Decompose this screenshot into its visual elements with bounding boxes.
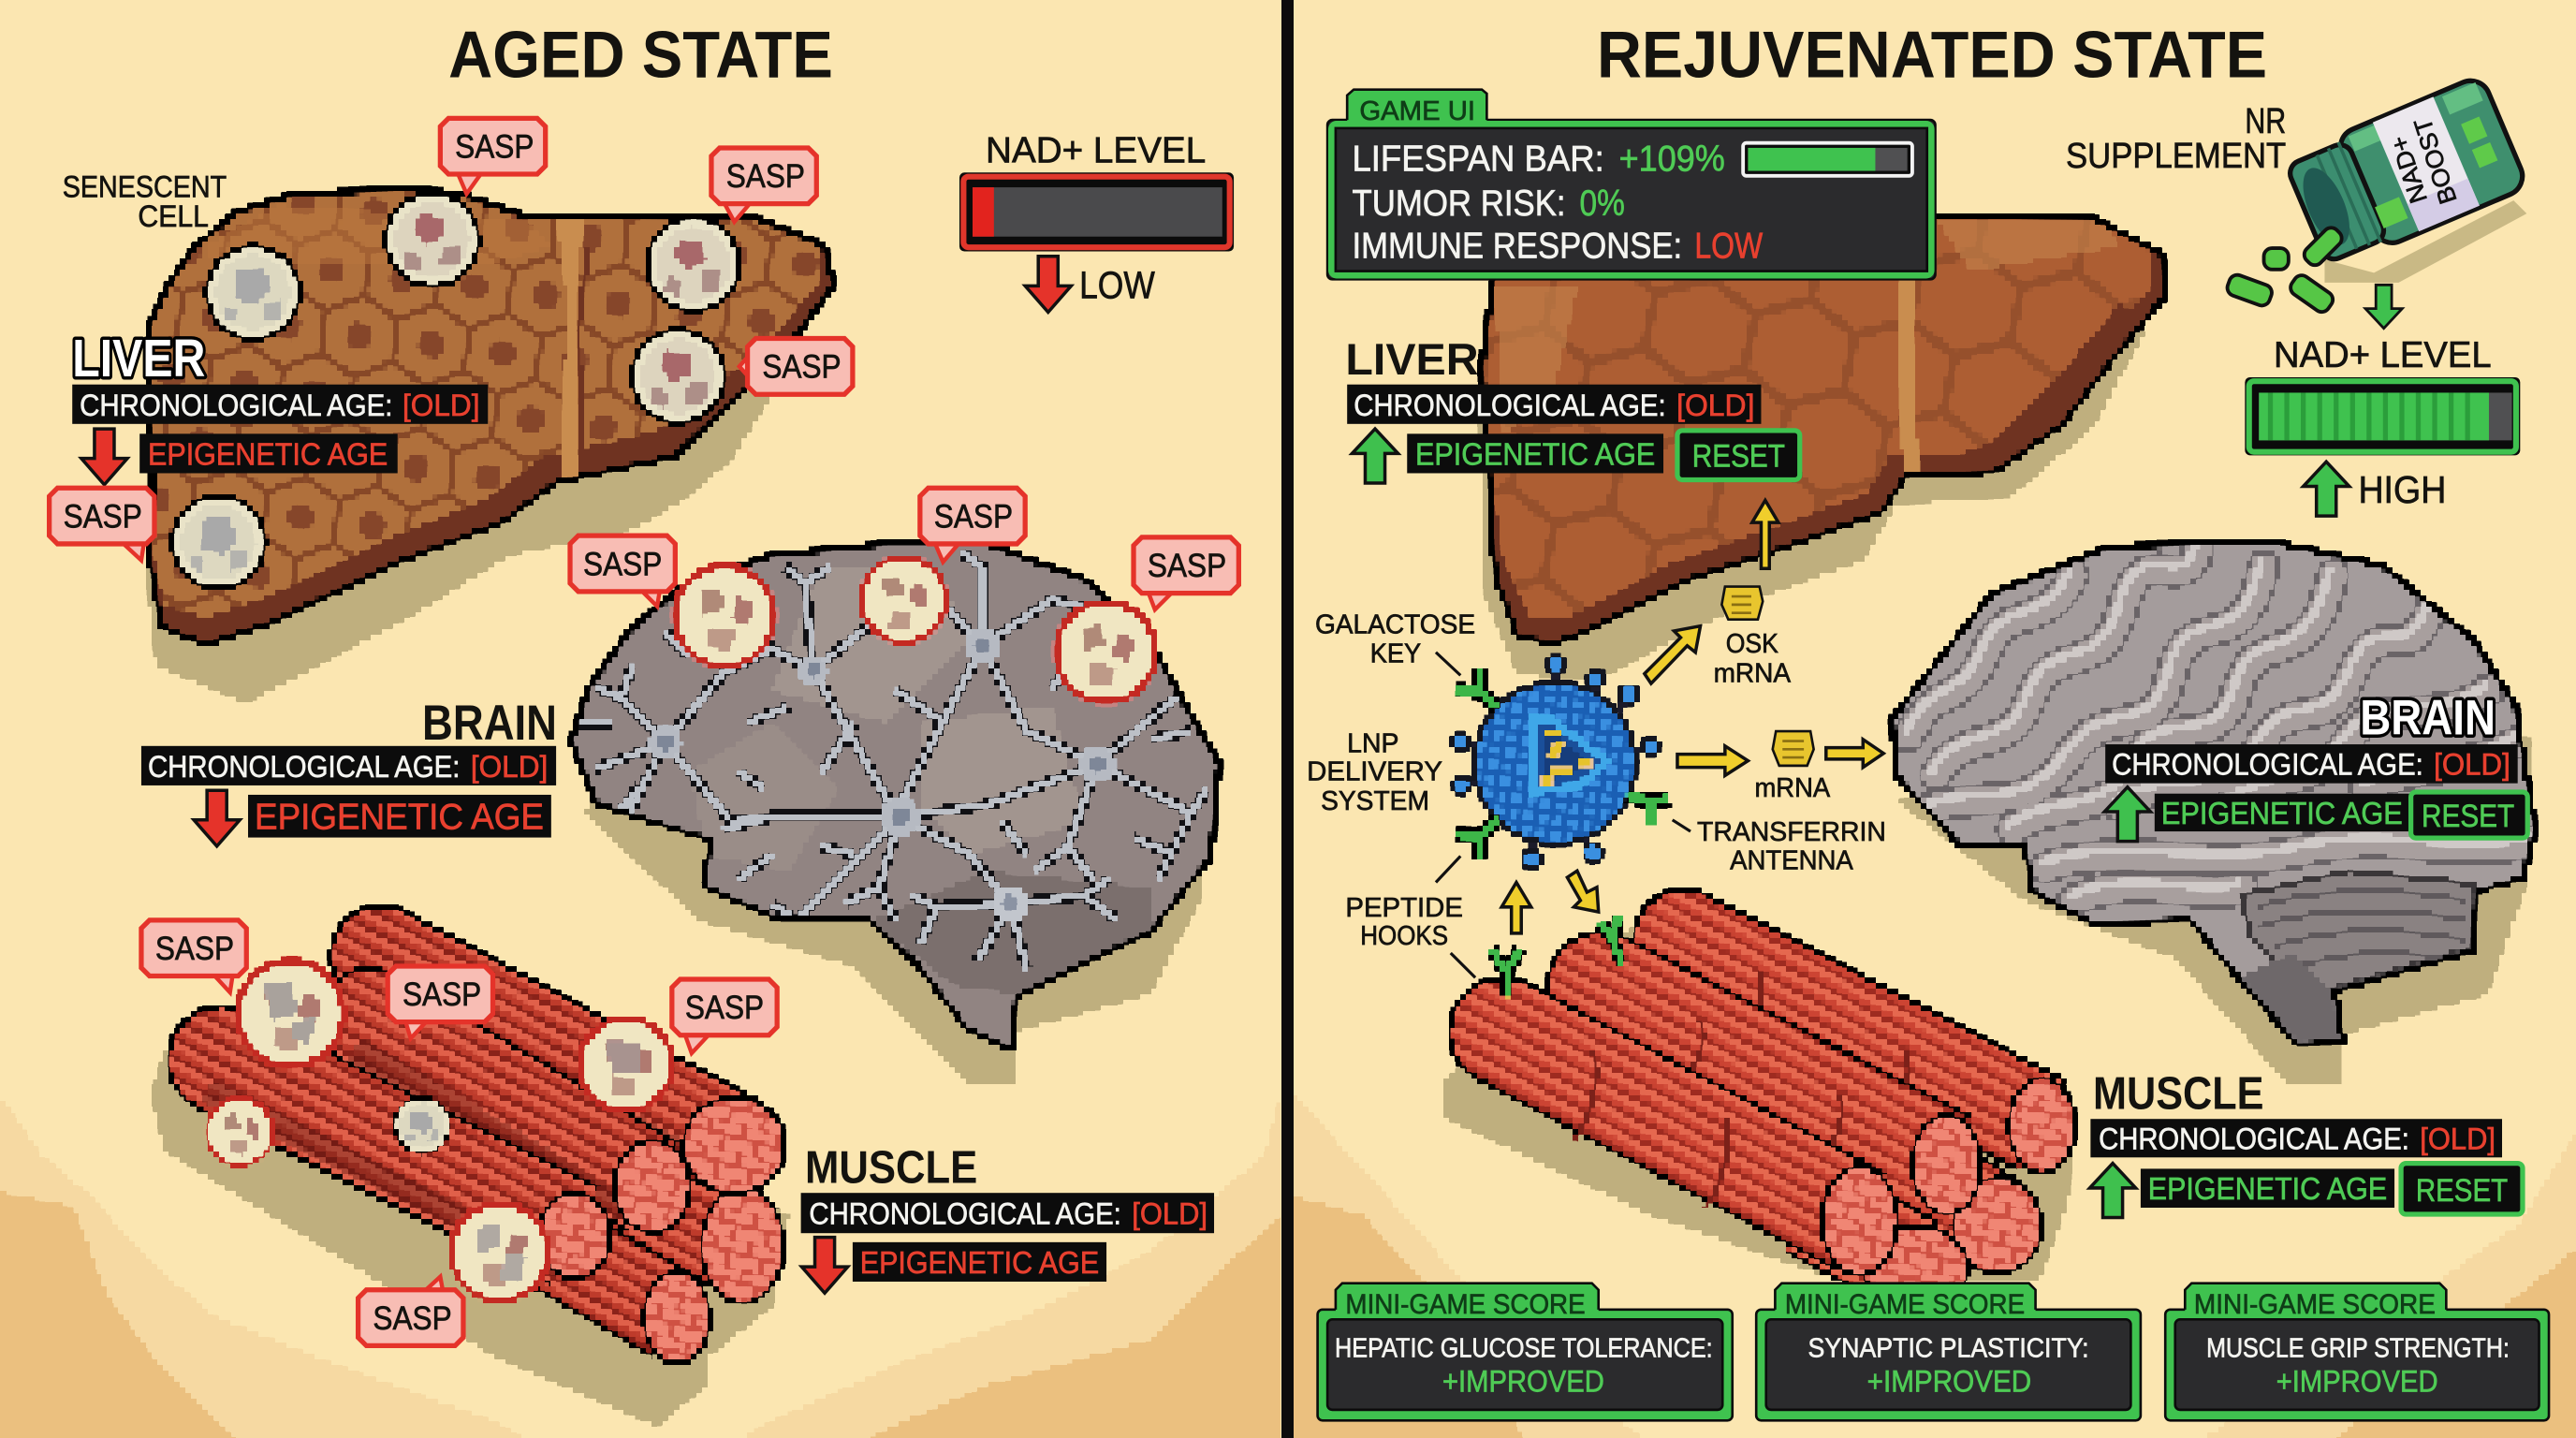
sasp bubble: SASP	[155, 931, 234, 967]
green antennas	[1457, 668, 1669, 858]
mini-game score: synaptic: MINI-GAME SCORE	[1785, 1289, 2025, 1320]
yellow arrows	[1501, 500, 1883, 933]
sasp bubble	[1134, 537, 1238, 609]
delivery labels: KEY	[1370, 638, 1421, 668]
game ui panel	[1327, 90, 1936, 279]
delivery labels: DELIVERY	[1307, 757, 1442, 787]
mini-game score: muscle: MUSCLE GRIP STRENGTH:	[2206, 1334, 2510, 1364]
muscle labels, rejuvenated: EPIGENETIC AGE	[2148, 1172, 2387, 1207]
sasp bubble	[711, 148, 816, 222]
virus spikes	[1453, 656, 1659, 869]
liver, aged	[131, 165, 855, 703]
mini-game score: muscle: +IMPROVED	[2276, 1365, 2438, 1399]
label: senescent cell: SENESCENT	[63, 170, 227, 204]
divider	[1281, 0, 1294, 1438]
fiber b	[317, 966, 690, 1232]
game ui panel: TUMOR RISK:	[1352, 183, 1566, 224]
label: nr supplement: SUPPLEMENT	[2066, 136, 2286, 175]
arrow toward brain	[1826, 740, 1883, 768]
muscle labels, aged: [OLD]	[1132, 1197, 1208, 1231]
muscle labels, rejuvenated: [OLD]	[2420, 1123, 2496, 1156]
delivery labels: mRNA	[1714, 658, 1792, 688]
label: nr supplement: NR	[2245, 101, 2286, 140]
muscle labels, rejuvenated: CHRONOLOGICAL AGE:	[2099, 1123, 2409, 1156]
mini-game score: muscle	[2165, 1284, 2549, 1420]
liver labels, aged: EPIGENETIC AGE	[148, 438, 388, 473]
sasp bubble	[672, 979, 777, 1053]
brain labels, aged: EPIGENETIC AGE	[255, 797, 544, 837]
liver labels, rejuvenated: RESET	[1692, 438, 1785, 474]
osk mrna icon	[1721, 587, 1763, 620]
arrow toward mrna	[1677, 746, 1748, 775]
muscle labels, aged: CHRONOLOGICAL AGE:	[809, 1197, 1121, 1231]
nad+ level gauge, aged: NAD+ LEVEL	[986, 131, 1206, 171]
muscle labels, aged: MUSCLE	[805, 1143, 977, 1194]
sasp bubble	[570, 536, 675, 607]
sasp callouts, aged	[50, 118, 1238, 1345]
liver, rejuvenated	[1471, 198, 2185, 679]
fiber c	[166, 1004, 611, 1278]
sasp bubble	[388, 966, 493, 1038]
fiber d	[1856, 1134, 2042, 1273]
fiber b	[1546, 930, 1982, 1214]
brain, rejuvenated	[1881, 526, 2554, 1086]
liver labels, rejuvenated: [OLD]	[1676, 389, 1754, 422]
liver labels, rejuvenated	[1345, 335, 1800, 483]
sasp bubble: SASP	[934, 498, 1013, 535]
nad+ level gauge, aged	[959, 131, 1234, 312]
nr supplement bottle	[2225, 75, 2528, 315]
mini-game score: synaptic: +IMPROVED	[1867, 1365, 2031, 1399]
muscle, rejuvenated	[1444, 888, 2075, 1312]
brain labels, aged: BRAIN	[422, 696, 557, 751]
game ui panel: LIFESPAN BAR:	[1352, 139, 1604, 180]
lifespan bar	[1743, 143, 1912, 176]
brain labels, aged: CHRONOLOGICAL AGE:	[148, 750, 460, 784]
muscle labels, aged	[801, 1143, 1214, 1293]
arrow up near muscle	[1501, 882, 1531, 933]
delivery labels: SYSTEM	[1321, 786, 1429, 816]
brain labels, rejuvenated: EPIGENETIC AGE	[2161, 797, 2403, 831]
sasp bubble: SASP	[583, 546, 662, 582]
senescent cells on muscle	[204, 958, 675, 1304]
muscle labels, rejuvenated: MUSCLE	[2093, 1069, 2264, 1120]
sasp bubble: SASP	[64, 498, 142, 535]
sasp bubble: SASP	[455, 128, 534, 165]
sasp bubble	[50, 488, 154, 560]
brain, aged	[559, 526, 1232, 1086]
fiber a	[1632, 888, 2075, 1173]
senescent cells on liver	[169, 191, 742, 592]
label: senescent cell: CELL	[138, 199, 209, 233]
muscle, aged	[151, 903, 788, 1426]
delivery labels: LNP	[1347, 728, 1398, 758]
virus body	[1472, 681, 1638, 846]
sasp bubble: SASP	[373, 1300, 452, 1337]
game ui panel: LOW	[1694, 227, 1764, 267]
mini-game score: synaptic	[1756, 1284, 2141, 1420]
panel: rejuvenated state	[1307, 17, 2554, 1420]
sasp bubble: SASP	[1148, 548, 1226, 584]
mini-game score: synaptic: SYNAPTIC PLASTICITY:	[1808, 1334, 2089, 1364]
sasp bubble: SASP	[762, 349, 842, 386]
delivery labels: GALACTOSE	[1315, 610, 1475, 640]
brain labels, rejuvenated	[2104, 691, 2527, 842]
nad+ level gauge, rejuvenated: NAD+ LEVEL	[2274, 335, 2492, 375]
sasp bubble	[920, 488, 1025, 562]
fiber a	[329, 903, 785, 1193]
delivery labels: TRANSFERRIN	[1697, 817, 1886, 847]
sasp bubble	[141, 920, 246, 992]
peptide hook receptors	[1492, 917, 1621, 997]
title: aged state: AGED STATE	[448, 17, 833, 91]
liver labels, rejuvenated: CHRONOLOGICAL AGE:	[1354, 389, 1666, 422]
brain labels, aged: [OLD]	[471, 750, 548, 784]
muscle labels, aged: EPIGENETIC AGE	[860, 1246, 1099, 1281]
delivery system: virus	[1453, 656, 1669, 869]
delivery labels: PEPTIDE	[1345, 893, 1463, 923]
delivery labels	[1307, 610, 1886, 977]
arrow up to liver	[1752, 500, 1778, 568]
mini-game score: hepatic	[1318, 1284, 1733, 1420]
sasp bubble	[739, 339, 853, 394]
game ui panel: IMMUNE RESPONSE:	[1352, 227, 1682, 267]
delivery labels: ANTENNA	[1730, 845, 1853, 875]
brain labels, rejuvenated: RESET	[2422, 799, 2514, 834]
delivery labels: HOOKS	[1360, 921, 1448, 951]
game ui panel: 0%	[1580, 183, 1625, 224]
delivery labels: mRNA	[1754, 773, 1831, 803]
mrna icon	[1773, 731, 1814, 766]
mini-game score: hepatic: +IMPROVED	[1442, 1365, 1604, 1399]
liver labels, aged: [OLD]	[402, 389, 479, 422]
liver labels, aged: CHRONOLOGICAL AGE:	[80, 389, 392, 422]
senescent cells on brain	[671, 554, 1159, 706]
fiber e	[1808, 1208, 1969, 1312]
label: senescent cell	[63, 170, 227, 233]
panel: aged state	[50, 17, 1238, 1426]
arrow down near muscle	[1567, 871, 1599, 912]
mini-game score: muscle: MINI-GAME SCORE	[2194, 1289, 2436, 1320]
liver labels, aged	[72, 329, 488, 485]
label: nr supplement	[2066, 101, 2286, 175]
title: rejuvenated state: REJUVENATED STATE	[1597, 17, 2267, 91]
nad+ level gauge, rejuvenated: HIGH	[2358, 468, 2446, 511]
fiber d	[559, 1151, 783, 1303]
nad+ level gauge, aged: LOW	[1079, 264, 1155, 307]
brain labels, aged	[141, 696, 557, 846]
spilled pills	[2225, 225, 2345, 315]
delivery labels: OSK	[1726, 629, 1778, 659]
arrow diagonal to osk mrna	[1645, 626, 1701, 683]
sasp bubble: SASP	[685, 990, 764, 1026]
brain labels, rejuvenated: [OLD]	[2434, 748, 2510, 782]
muscle labels, rejuvenated: RESET	[2416, 1173, 2508, 1209]
mrna icons	[1721, 587, 1814, 766]
liver labels, rejuvenated: EPIGENETIC AGE	[1415, 438, 1655, 473]
liver labels, aged: LIVER	[72, 329, 205, 388]
cerebellum	[2241, 871, 2474, 1042]
muscle labels, rejuvenated	[2089, 1069, 2523, 1218]
nr supplement bottle: BOOST	[2408, 114, 2463, 208]
sasp bubble: SASP	[402, 976, 481, 1013]
nr supplement bottle: NAD+	[2385, 133, 2433, 207]
game ui panel: GAME UI	[1359, 96, 1475, 126]
background dunes	[0, 1093, 2576, 1438]
fiber c	[1447, 976, 1897, 1275]
game ui panel: +109%	[1619, 139, 1725, 180]
liver labels, rejuvenated: LIVER	[1345, 335, 1479, 385]
brain labels, rejuvenated: BRAIN	[2360, 691, 2496, 746]
mini-game score: hepatic: MINI-GAME SCORE	[1345, 1289, 1586, 1320]
mini-game score: hepatic: HEPATIC GLUCOSE TOLERANCE:	[1335, 1334, 1713, 1364]
sasp bubble: SASP	[726, 158, 805, 195]
sasp bubble	[359, 1277, 463, 1345]
sasp bubble	[440, 118, 546, 194]
fiber e	[559, 1249, 710, 1364]
brain labels, rejuvenated: CHRONOLOGICAL AGE:	[2112, 748, 2423, 782]
arrow: supplement to nad+	[2365, 285, 2402, 329]
nad+ level gauge, rejuvenated	[2245, 335, 2520, 516]
